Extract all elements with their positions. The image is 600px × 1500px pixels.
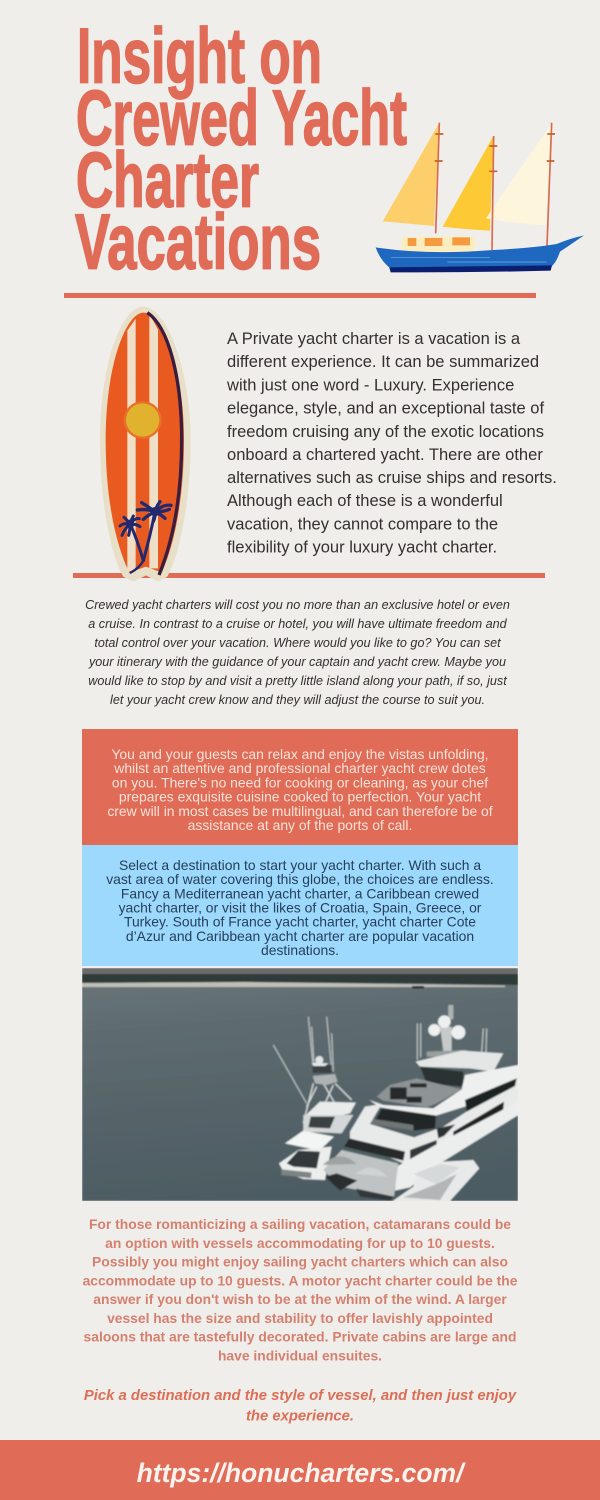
icon: surfboard bbox=[100, 306, 191, 582]
divider line: top bbox=[64, 293, 536, 298]
closing paragraph: saloons that are tastefully decorated. Private cabins are large and bbox=[84, 1329, 516, 1345]
intro paragraph: flexibility of your luxury yacht charter. bbox=[227, 538, 497, 556]
panel: select a destination: Fancy a Mediterranean yacht charter, a Caribbean crewed bbox=[121, 885, 479, 901]
footer band with URL bbox=[0, 1440, 600, 1500]
panel: select a destination bbox=[82, 845, 518, 966]
photo: motor yachts at anchor bbox=[82, 968, 518, 1201]
panel: relax and enjoy: prepares exquisite cuisine cooked to perfection. Your yacht bbox=[119, 789, 481, 805]
panel: select a destination: yacht charter, or visit the likes of Croatia, Spain, Greece, or bbox=[119, 900, 482, 916]
intro paragraph bbox=[226, 329, 557, 556]
panel: relax and enjoy: You and your guests can relax and enjoy the vistas unfolding, bbox=[111, 746, 489, 762]
title: Vacations bbox=[75, 198, 321, 286]
panel: select a destination: Turkey. South of France yacht charter, yacht charter Cote bbox=[124, 914, 476, 930]
closing paragraph: Possibly you might enjoy sailing yacht charters which can also bbox=[92, 1254, 508, 1270]
intro paragraph: with just one word - Luxury. Experience bbox=[226, 376, 514, 394]
panel: relax and enjoy bbox=[82, 729, 518, 845]
closing paragraph bbox=[83, 1216, 518, 1364]
intro paragraph: vacation, they cannot compare to the bbox=[227, 514, 498, 534]
intro paragraph: freedom cruising any of the exotic locations bbox=[227, 422, 544, 441]
italic paragraph: let your yacht crew know and they will adjust the course to suit you. bbox=[110, 693, 485, 707]
panel: relax and enjoy: assistance at any of the ports of call. bbox=[188, 817, 412, 833]
intro paragraph: elegance, style, and an exceptional taste of bbox=[227, 398, 544, 418]
sport-fishing boat bbox=[273, 1017, 356, 1180]
panel: select a destination: d’Azur and Caribbean yacht charter are popular vacation bbox=[126, 928, 474, 944]
closing paragraph: answer if you don't wish to be at the whim of the wind. A larger bbox=[93, 1291, 507, 1307]
palm trees bbox=[120, 502, 171, 573]
intro paragraph: different experience. It can be summarized bbox=[227, 352, 539, 371]
call to action bbox=[84, 1388, 517, 1424]
panel: relax and enjoy: whilst an attentive and professional charter yacht crew dotes bbox=[113, 760, 486, 776]
intro paragraph: alternatives such as cruise ships and resorts. bbox=[227, 468, 557, 487]
panel: select a destination: Select a destination to start your yacht charter. With such a bbox=[119, 857, 481, 873]
footer band with URL: https://honucharters.com/ bbox=[137, 1458, 466, 1488]
italic paragraph: Crewed yacht charters will cost you no more than an exclusive hotel or even bbox=[85, 598, 510, 612]
superyacht bbox=[323, 1005, 518, 1201]
italic paragraph: would like to stop by and visit a pretty little island along your path, if so, just bbox=[88, 674, 507, 688]
panel: select a destination: destinations. bbox=[261, 942, 339, 958]
italic paragraph: total control over your vacation. Where would you like to go? You can set bbox=[94, 636, 501, 650]
closing paragraph: an option with vessels accommodating for up to 10 guests. bbox=[105, 1235, 495, 1251]
closing paragraph: For those romanticizing a sailing vacation, catamarans could be bbox=[89, 1216, 511, 1232]
panel: relax and enjoy: on you. There's no need for cooking or cleaning, as your chef bbox=[112, 774, 488, 790]
intro paragraph: onboard a chartered yacht. There are other bbox=[227, 445, 543, 464]
call to action: Pick a destination and the style of vessel, and then just enjoy bbox=[84, 1388, 517, 1404]
intro paragraph: A Private yacht charter is a vacation is a bbox=[227, 329, 521, 348]
title: Charter bbox=[76, 136, 259, 224]
panel: relax and enjoy: crew will in most cases be multilingual, and can therefore be of bbox=[107, 803, 493, 819]
icon: sailing boat bbox=[376, 122, 584, 272]
divider line: middle bbox=[73, 573, 545, 578]
tender boat bbox=[393, 1160, 479, 1201]
call to action: the experience. bbox=[246, 1408, 354, 1424]
intro paragraph: Although each of these is a wonderful bbox=[227, 491, 503, 510]
italic paragraph bbox=[85, 598, 510, 707]
italic paragraph: a cruise. In contrast to a cruise or hotel, you will have ultimate freedom and bbox=[88, 617, 508, 631]
title: Insight on bbox=[77, 12, 322, 100]
title bbox=[75, 12, 407, 286]
italic paragraph: your itinerary with the guidance of your captain and yacht crew. Maybe you bbox=[88, 655, 506, 669]
closing paragraph: have individual ensuites. bbox=[218, 1348, 382, 1364]
closing paragraph: accommodate up to 10 guests. A motor yacht charter could be the bbox=[83, 1272, 518, 1288]
closing paragraph: vessel has the size and stability to offer lavishly appointed bbox=[107, 1310, 493, 1326]
title: Crewed Yacht bbox=[76, 74, 407, 162]
panel: select a destination: vast area of water covering this globe, the choices are endless. bbox=[106, 871, 494, 887]
